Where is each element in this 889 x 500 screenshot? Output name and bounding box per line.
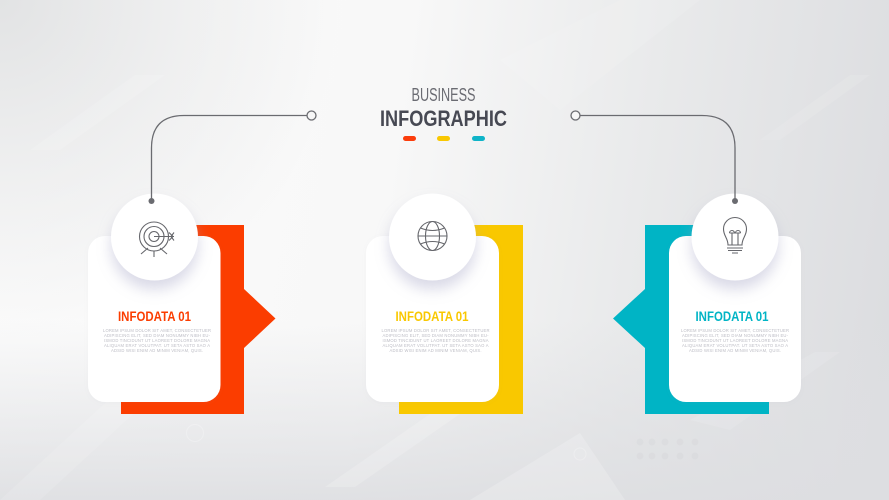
body text: LOREM IPSUM DOLOR SIT AMET, CONSECTETUER: [103, 328, 211, 333]
title: [380, 85, 507, 131]
icon: light bulb: [724, 218, 746, 253]
icon circle: [389, 194, 476, 280]
body text: ADSID WISI ENIM AD MINIM VENIAM, QUIS.: [111, 348, 203, 353]
yellow backing: [399, 225, 523, 414]
decorative dot grid: [636, 438, 698, 460]
heading: INFODATA 01: [118, 308, 191, 324]
body text: [681, 328, 789, 353]
icon: target: [140, 222, 174, 257]
body text: [382, 328, 490, 353]
panel: teal: [613, 194, 801, 414]
body text: ISMOD TINCIDUNT UT LAOREET DOLORE MAGNA: [104, 338, 210, 343]
icon: globe: [418, 222, 447, 250]
white card: [88, 236, 220, 402]
body text: ALIQUAM ERAT VOLUTPAT. UT SETA ASTO SAO A: [382, 343, 489, 348]
body text: [103, 328, 211, 353]
panel: yellow: [366, 194, 523, 414]
icon circle: [692, 194, 778, 280]
body text: ALIQUAM ERAT VOLUTPAT. UT SETA ASTO SAO A: [104, 343, 210, 348]
body text: ADIPISCING ELIT, SED DIAM NONUMMY NIBH EU-: [382, 333, 489, 338]
orange backing with arrow: [121, 225, 276, 414]
body text: ALIQUAM ERAT VOLUTPAT. UT SETA ASTO SAO A: [682, 343, 788, 348]
body text: LOREM IPSUM DOLOR SIT AMET, CONSECTETUER: [382, 328, 490, 333]
body text: ADIPISCING ELIT, SED DIAM NONUMMY NIBH EU-: [104, 333, 211, 338]
body text: LOREM IPSUM DOLOR SIT AMET, CONSECTETUER: [681, 328, 789, 333]
body text: ISMOD TINCIDUNT UT LAOREET DOLORE MAGNA: [382, 338, 489, 343]
connector right: [571, 111, 738, 204]
body text: ADSID WISI ENIM AD MINIM VENIAM, QUIS.: [689, 348, 781, 353]
title line: business: BUSINESS: [412, 85, 476, 105]
body text: ISMOD TINCIDUNT UT LAOREET DOLORE MAGNA: [682, 338, 788, 343]
icon circle: [111, 194, 198, 280]
white card: [669, 236, 801, 402]
title line: infographic: INFOGRAPHIC: [380, 106, 507, 131]
body text: ADIPISCING ELIT, SED DIAM NONUMMY NIBH EU-: [682, 333, 789, 338]
body text: ADSID WISI ENIM AD MINIM VENIAM, QUIS.: [390, 348, 482, 353]
heading: INFODATA 01: [396, 308, 469, 324]
panel: orange: [88, 194, 276, 414]
colour dots under title: [403, 136, 485, 141]
connector left: [148, 111, 316, 204]
white card: [366, 236, 499, 402]
heading: INFODATA 01: [696, 308, 769, 324]
teal backing with arrow: [613, 225, 769, 414]
